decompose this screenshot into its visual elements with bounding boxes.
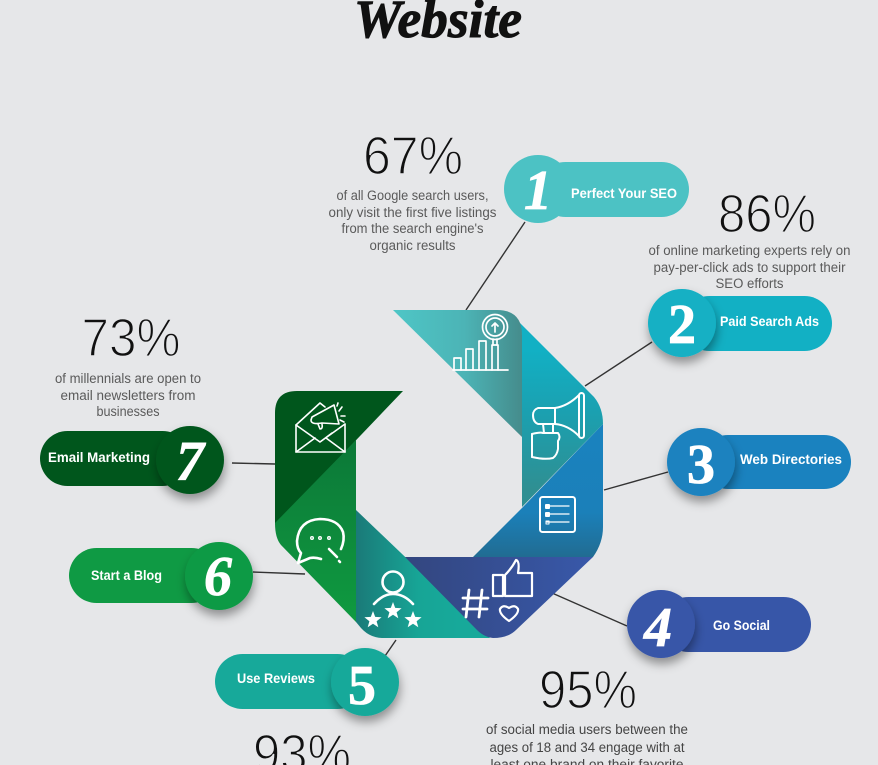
stat: 67%: of all Google search users, — [336, 188, 488, 203]
segment 7: email marketing — [275, 391, 403, 525]
step 6: Start a Blog: 6 — [204, 546, 232, 608]
stat: 73% — [55, 308, 201, 419]
step 1: Perfect Your SEO — [504, 155, 689, 223]
stat: 73%: email newsletters from — [60, 388, 196, 403]
stat: 73%: of millennials are open to — [55, 371, 201, 386]
icon: checklist — [540, 497, 575, 532]
step 7: Email Marketing: 7 — [176, 431, 206, 493]
stat: 67% — [328, 126, 497, 253]
stat: 95%: of social media users between the — [486, 722, 688, 737]
stat: 67%: 67% — [363, 126, 463, 186]
step 6: Start a Blog — [69, 542, 253, 610]
segment 3: directories — [473, 424, 603, 557]
stat: 67%: only visit the first five listings — [328, 205, 497, 220]
stat: 86% — [648, 184, 850, 291]
step 4: Go Social: Go Social — [713, 617, 770, 633]
step 2: Paid Search Ads — [648, 289, 832, 357]
stat: 73%: 73% — [82, 308, 180, 368]
stat: 73%: businesses — [96, 404, 160, 419]
stat: 95%: 95% — [539, 660, 637, 720]
stat: 95% — [486, 660, 688, 765]
step 2: Paid Search Ads: 2 — [668, 294, 696, 356]
icon: envelope with megaphone — [296, 403, 345, 452]
stat: 95%: ages of 18 and 34 engage with at — [490, 740, 685, 755]
icon: speech bubble with pen — [297, 519, 344, 563]
stat: 67%: organic results — [370, 238, 456, 253]
stat: 67%: from the search engine's — [342, 221, 484, 236]
step 3: Web Directories: Web Directories — [740, 451, 842, 467]
step 4: Go Social — [627, 590, 811, 659]
stat: 86%: SEO efforts — [716, 276, 784, 291]
step 2: Paid Search Ads: Paid Search Ads — [720, 313, 819, 329]
icon: bar chart with magnifier — [453, 314, 508, 370]
stat: 86%: pay-per-click ads to support their — [654, 260, 846, 275]
step 5: Use Reviews: Use Reviews — [237, 670, 315, 686]
segment 2: paid ads — [512, 315, 603, 507]
step 5: Use Reviews — [215, 648, 399, 717]
octagon diagram — [275, 310, 603, 638]
step 5: Use Reviews: 5 — [348, 655, 376, 717]
step 4: Go Social: 4 — [643, 597, 672, 659]
segment 5: reviews — [356, 510, 490, 638]
step 1: Perfect Your SEO: Perfect Your SEO — [571, 185, 677, 201]
step 3: Web Directories — [667, 428, 851, 496]
step 7: Email Marketing — [40, 426, 224, 494]
segment 4: social — [405, 557, 593, 638]
step 6: Start a Blog: Start a Blog — [91, 567, 162, 583]
icon: thumbs up, hash, heart — [463, 560, 532, 621]
connector lines — [232, 222, 668, 656]
step 7: Email Marketing: Email Marketing — [48, 449, 150, 465]
segment 6: blog — [275, 440, 356, 622]
stat: 86%: 86% — [718, 184, 816, 244]
stat: 86%: of online marketing experts rely on — [648, 243, 850, 258]
step 3: Web Directories: 3 — [687, 434, 715, 496]
segment 1: seo — [393, 310, 522, 437]
step 1: Perfect Your SEO: 1 — [524, 160, 552, 222]
icon: user with stars — [364, 572, 422, 627]
icon: megaphone in hand — [532, 393, 584, 459]
